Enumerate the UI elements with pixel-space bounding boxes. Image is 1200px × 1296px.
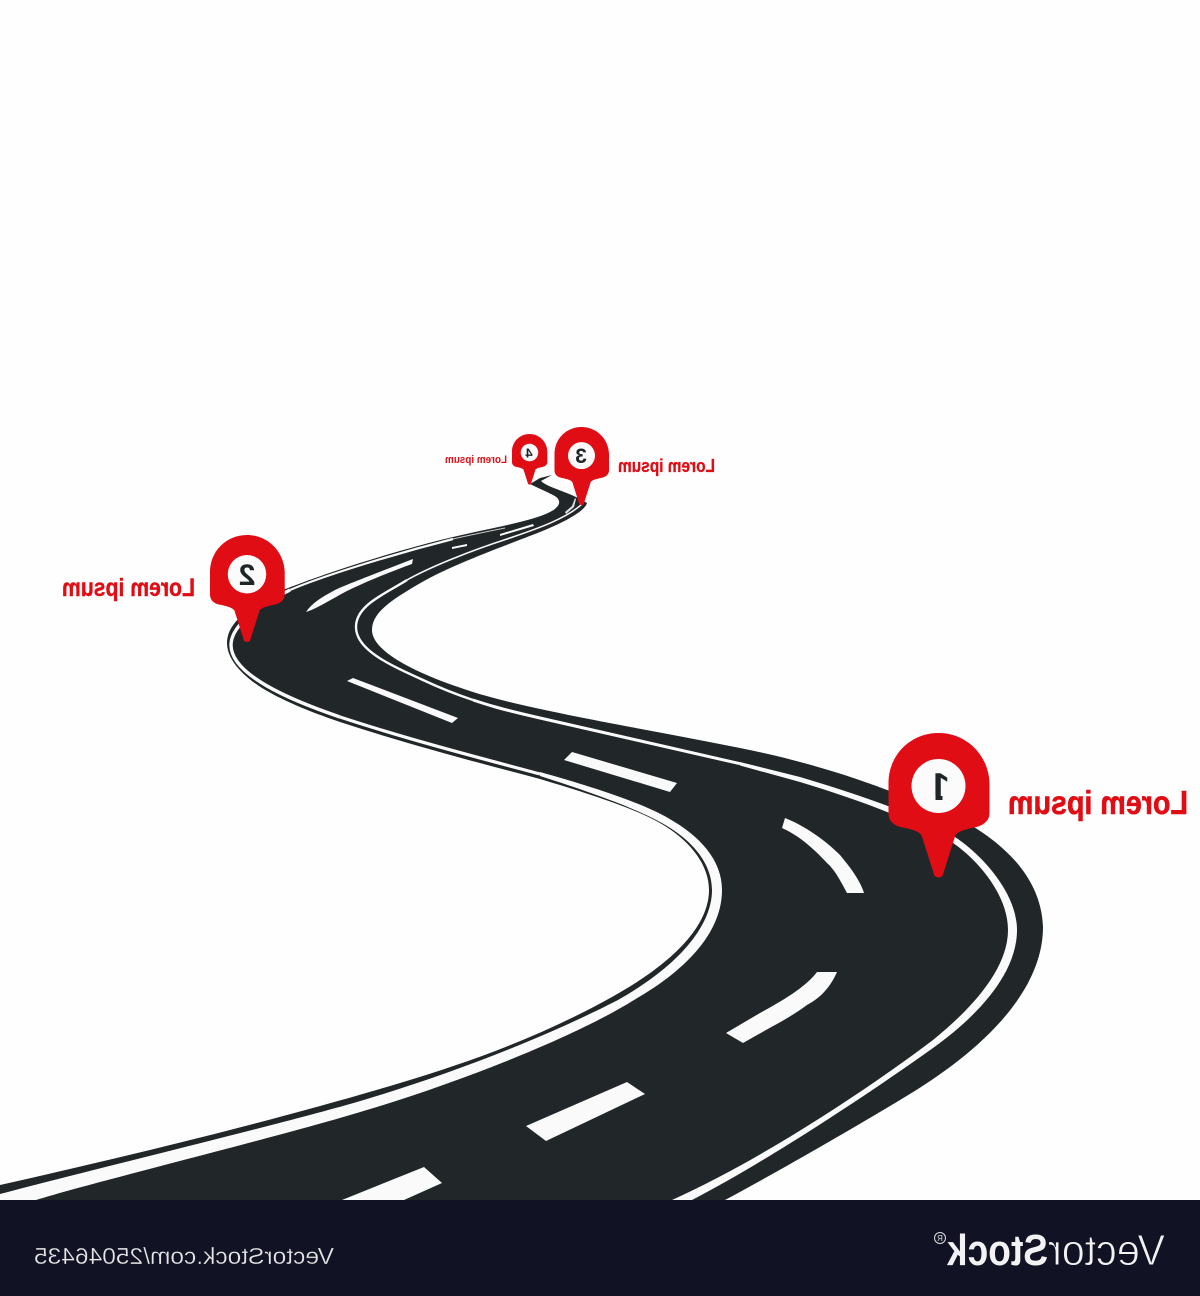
left edge line (0, 528, 722, 1200)
marker 4 (445, 434, 547, 485)
right edge line (356, 504, 1017, 1200)
logo wordmark: Vector (1048, 1226, 1165, 1275)
road asphalt surface (0, 475, 1043, 1200)
pin 3 (554, 427, 609, 505)
number 3: 3 (575, 445, 587, 468)
marker 1 (888, 733, 1188, 878)
label 3: Lorem ipsum (618, 456, 715, 476)
logo wordmark: Stock (947, 1226, 1048, 1275)
number 2: 2 (239, 559, 255, 592)
number 4: 4 (525, 446, 533, 460)
label 1: Lorem ipsum (1008, 784, 1188, 821)
winding road (0, 475, 1043, 1200)
pin 4 (512, 434, 547, 485)
footer bar (0, 1200, 1200, 1296)
footer url: VectorStock.com/25046435 (34, 1243, 334, 1269)
logo wordmark (947, 1226, 1165, 1275)
pin 1 (888, 733, 990, 878)
number 1: 1 (928, 766, 950, 809)
label 2: Lorem ipsum (62, 574, 195, 602)
registered mark (934, 1232, 946, 1244)
centre dashes (306, 498, 864, 1200)
marker 3 (554, 427, 715, 505)
label 4: Lorem ipsum (445, 454, 507, 466)
pin 2 (210, 535, 285, 642)
registered mark: R (937, 1234, 943, 1243)
marker 2 (62, 535, 285, 642)
